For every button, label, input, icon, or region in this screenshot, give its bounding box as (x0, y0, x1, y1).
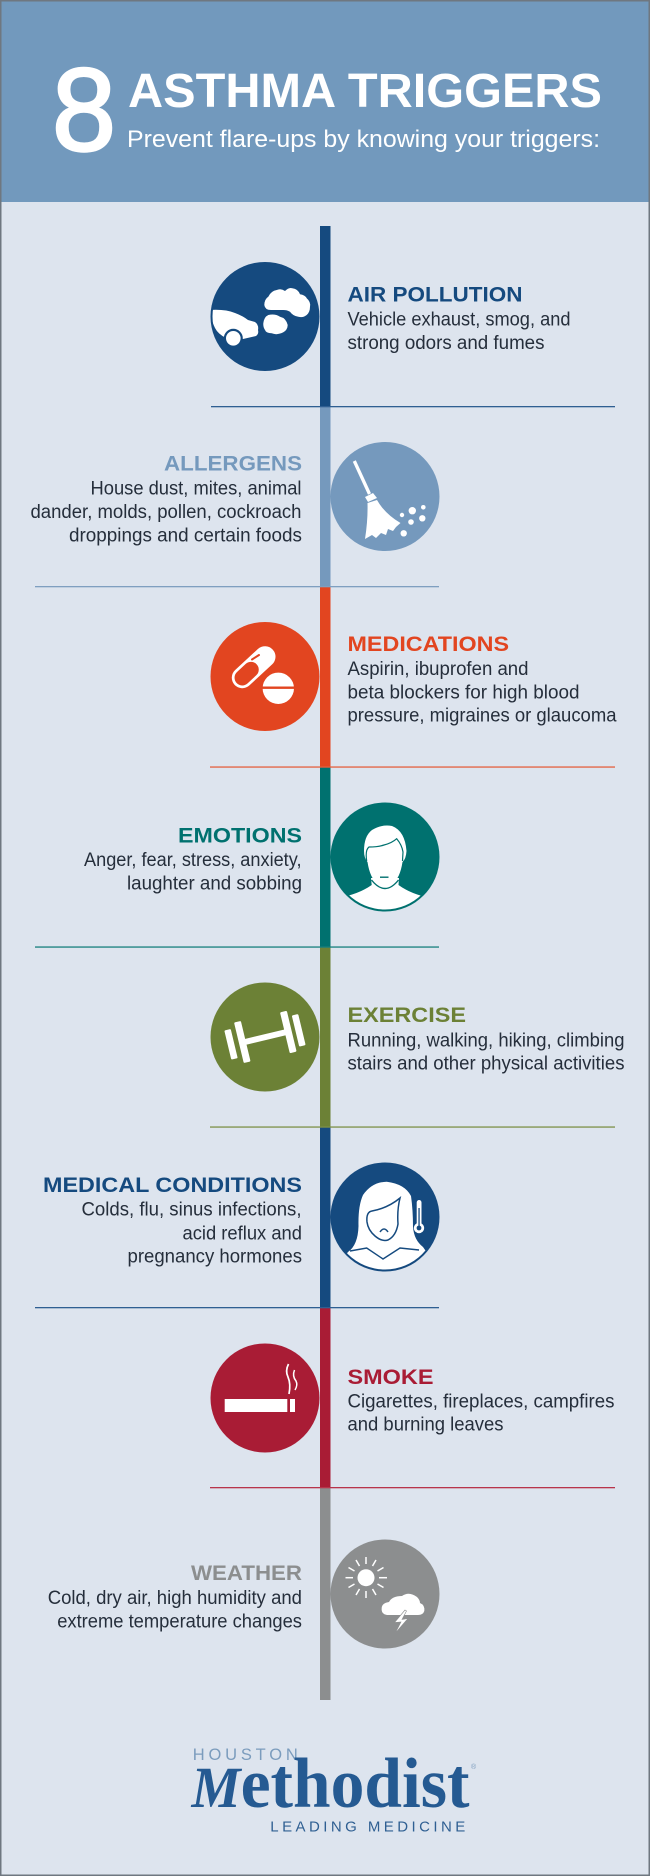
description (84, 850, 302, 894)
description: Anger, fear, stress, anxiety, (84, 850, 302, 871)
description: dander, molds, pollen, cockroach (30, 502, 302, 523)
description: and burning leaves (348, 1414, 504, 1435)
heading: EMOTIONS (178, 823, 302, 847)
description: droppings and certain foods (69, 525, 302, 546)
central timeline trunk (320, 226, 330, 1700)
logo: Houston Methodist: ® (471, 1763, 477, 1771)
logo: Houston Methodist: Methodist (191, 1745, 470, 1823)
description: Cigarettes, fireplaces, campfires (348, 1391, 614, 1412)
icon: sun and storm cloud (330, 1540, 440, 1648)
icon: man portrait (330, 802, 440, 915)
description: laughter and sobbing (127, 873, 302, 894)
description (348, 1391, 614, 1435)
icon: car exhaust (210, 262, 320, 371)
description (30, 479, 302, 546)
icon: capsule and tablet (210, 622, 320, 731)
icon: cigarette (210, 1344, 320, 1452)
description: Aspirin, ibuprofen and (348, 659, 528, 680)
description: pregnancy hormones (128, 1247, 302, 1268)
description: stairs and other physical activities (348, 1054, 624, 1075)
subtitle: Prevent flare-ups by knowing your triggers: (127, 126, 600, 153)
description: extreme temperature changes (57, 1611, 302, 1632)
heading: MEDICAL CONDITIONS (43, 1173, 302, 1197)
description: Cold, dry air, high humidity and (48, 1588, 302, 1609)
description: strong odors and fumes (348, 333, 544, 354)
big number 8: 8 (52, 44, 116, 176)
panel: medical conditions (43, 1162, 440, 1272)
panel: weather (48, 1540, 440, 1648)
logo: Houston Methodist: LEADING MEDICINE (270, 1819, 465, 1836)
panel: air pollution (210, 262, 570, 371)
panel: exercise (210, 982, 624, 1092)
description (348, 310, 570, 354)
logo: Houston Methodist: HOUSTON (193, 1746, 298, 1764)
icon: broom and dust (330, 442, 440, 551)
description (48, 1588, 302, 1632)
title: ASTHMA TRIGGERS (128, 65, 602, 118)
heading: WEATHER (191, 1561, 302, 1585)
heading: SMOKE (348, 1365, 434, 1389)
description: House dust, mites, animal (90, 479, 302, 500)
description: acid reflux and (182, 1223, 302, 1244)
icon: woman with thermometer (330, 1162, 440, 1272)
panel: smoke (210, 1344, 614, 1452)
panel: medications (210, 622, 617, 731)
heading: AIR POLLUTION (348, 283, 522, 307)
description (348, 1030, 624, 1075)
description (348, 659, 617, 727)
panel: allergens (30, 442, 440, 551)
icon: dumbbell (210, 982, 320, 1092)
description: Colds, flu, sinus infections, (82, 1200, 302, 1221)
header band (0, 0, 650, 202)
heading: EXERCISE (348, 1003, 466, 1027)
description: pressure, migraines or glaucoma (348, 706, 617, 727)
heading: MEDICATIONS (348, 632, 509, 656)
panel: emotions (84, 802, 440, 915)
description: Running, walking, hiking, climbing (348, 1030, 624, 1051)
description: beta blockers for high blood (348, 682, 580, 703)
description: Vehicle exhaust, smog, and (348, 310, 570, 331)
heading: ALLERGENS (164, 452, 302, 476)
description (82, 1200, 302, 1268)
